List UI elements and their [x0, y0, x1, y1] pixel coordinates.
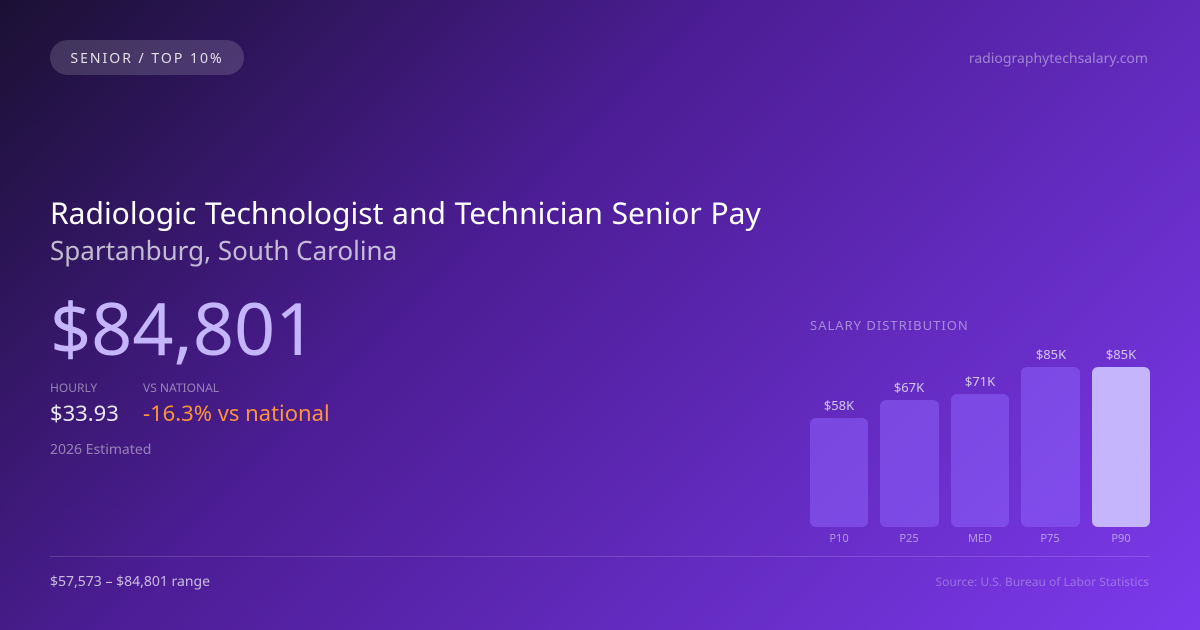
- bar P10: [810, 418, 868, 527]
- chart heading: SALARY DISTRIBUTION: [810, 316, 969, 334]
- bar P25: [880, 400, 939, 527]
- value P90: $85K: [1106, 345, 1136, 363]
- stat: vs national: [143, 379, 330, 428]
- label P25: P25: [899, 531, 919, 546]
- bar MED: [951, 394, 1009, 527]
- vs national label: VS NATIONAL: [143, 379, 219, 396]
- salary range: $57,573 – $84,801 range: [50, 572, 210, 591]
- label P75: P75: [1040, 531, 1060, 546]
- bar P90: [1092, 367, 1150, 527]
- value MED: $71K: [965, 372, 995, 390]
- value P25: $67K: [894, 378, 924, 396]
- bar P75: [1021, 367, 1080, 527]
- label MED: MED: [968, 531, 992, 546]
- vs national value: -16.3% vs national: [143, 398, 330, 428]
- estimate note: 2026 Estimated: [50, 440, 151, 459]
- headline salary: $84,801: [50, 279, 316, 377]
- stat: hourly: [50, 379, 119, 428]
- title: Radiologic Technologist and Technician Senior Pay: [50, 192, 761, 233]
- hourly value: $33.93: [50, 398, 119, 428]
- label P10: P10: [829, 531, 849, 546]
- value P10: $58K: [824, 396, 854, 414]
- source note: Source: U.S. Bureau of Labor Statistics: [936, 573, 1149, 590]
- category badge: [50, 40, 244, 75]
- hourly label: HOURLY: [50, 379, 97, 396]
- category badge: SENIOR / TOP 10%: [70, 49, 224, 68]
- value P75: $85K: [1036, 345, 1066, 363]
- location subtitle: Spartanburg, South Carolina: [50, 232, 397, 268]
- site domain: radiographytechsalary.com: [969, 49, 1148, 68]
- label P90: P90: [1111, 531, 1131, 546]
